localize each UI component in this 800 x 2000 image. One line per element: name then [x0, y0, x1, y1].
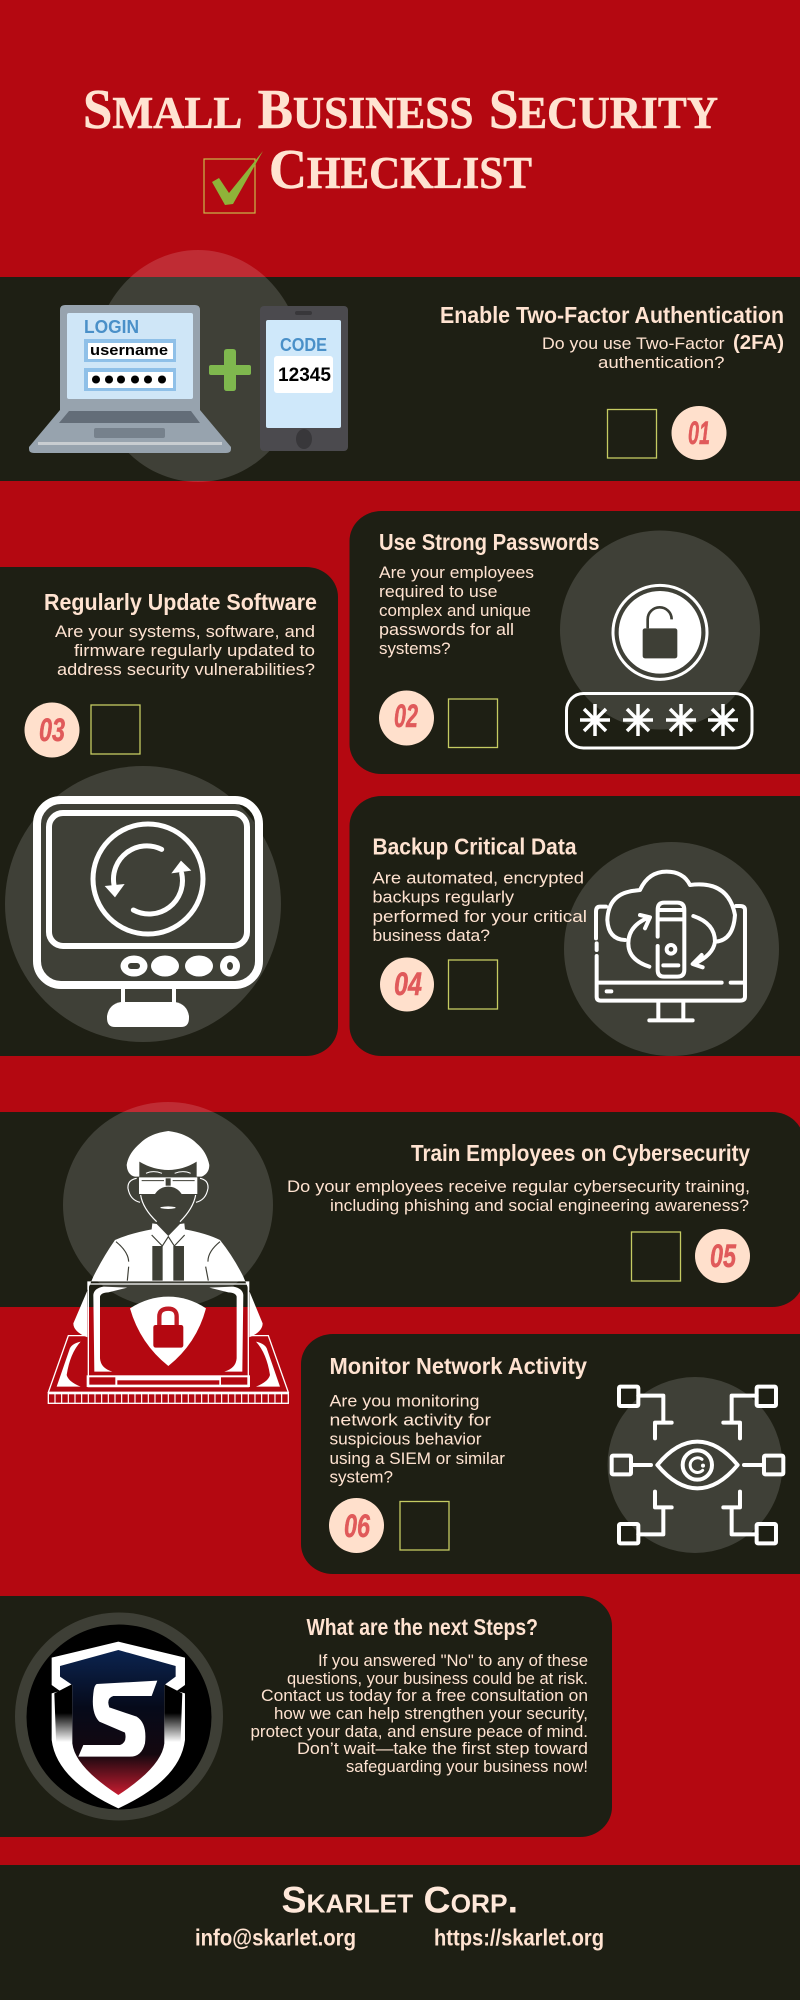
icon: cloud backup monitor [596, 872, 745, 1020]
number badge 01 [672, 406, 726, 460]
question text: including phishing and social engineering awareness? [330, 1196, 749, 1215]
question text: performed for your critical [372, 907, 587, 926]
question text: (2FA) [733, 332, 784, 354]
company name: Skarlet Corp. [282, 1880, 518, 1920]
question text: Are automated, encrypted [372, 868, 584, 888]
keyboard base [48, 1336, 288, 1403]
hair [127, 1131, 209, 1177]
panel: two-factor authentication [0, 250, 800, 482]
email: info@skarlet.org [195, 1924, 356, 1950]
title [83, 70, 718, 203]
heading: What are the next Steps? [306, 1614, 538, 1640]
body text: safeguarding your business now! [346, 1757, 588, 1776]
icon: employee at secure laptop [48, 1131, 288, 1403]
body text: Contact us today for a free consultation on [261, 1686, 588, 1705]
number badge 04 [380, 958, 434, 1012]
question text: Are you monitoring [330, 1392, 480, 1410]
icon: laptop login [29, 305, 231, 453]
question text: Do your employees receive regular cybersecurity training, [287, 1177, 750, 1196]
question text [330, 1392, 505, 1486]
number badge 02: 02 [394, 698, 418, 734]
panel: strong passwords [350, 511, 800, 774]
question text: backups regularly [372, 888, 515, 906]
panel: update software [0, 567, 338, 1056]
question text: Are your employees [379, 563, 534, 582]
body text: protect your data, and ensure peace of mind. [250, 1722, 588, 1741]
question text [287, 1177, 750, 1215]
question text: business data? [372, 926, 490, 945]
body text: If you answered "No" to any of these [318, 1651, 588, 1670]
question text: suspicious behavior [330, 1430, 482, 1448]
body text: Don’t wait—take the first step toward [297, 1739, 588, 1758]
checkbox [608, 410, 656, 458]
heading: Regularly Update Software [44, 589, 317, 615]
logo: Skarlet shield [15, 1612, 223, 1820]
heading: Enable Two-Factor Authentication [440, 302, 784, 328]
icon: title checkbox with green check [204, 151, 263, 213]
panel: backup data [350, 796, 800, 1056]
body text: questions, your business could be at risk. [287, 1669, 588, 1688]
question text: complex and unique [379, 601, 531, 620]
panel: train employees [0, 1102, 800, 1403]
laptop frame [87, 1284, 250, 1387]
question text: passwords for all [379, 620, 514, 639]
number badge 05: 05 [710, 1238, 737, 1274]
torso and arms [73, 1223, 263, 1337]
question text: using a SIEM or similar [330, 1449, 505, 1468]
question text [55, 622, 315, 679]
heading: Train Employees on Cybersecurity [411, 1140, 750, 1166]
number badge 03: 03 [39, 712, 65, 748]
icon: phone with code [260, 306, 348, 451]
body text [250, 1651, 588, 1776]
icon: network eye [612, 1387, 783, 1543]
body text: how we can help strengthen your security, [274, 1704, 588, 1723]
footer band [0, 1865, 800, 2000]
number badge 05 [695, 1229, 750, 1283]
icon: open padlock [613, 585, 707, 679]
heading: Backup Critical Data [372, 834, 577, 860]
panel: monitor network [301, 1334, 800, 1574]
icon: laptop login: LOGIN [84, 317, 139, 337]
icon: monitor with refresh [37, 800, 259, 1027]
icon: laptop login: username [90, 342, 168, 359]
checkbox [632, 1232, 680, 1281]
question text: Are your systems, software, and [55, 622, 315, 641]
icon: phone with code: 12345 [278, 365, 331, 386]
question text [379, 563, 534, 658]
question text [372, 868, 587, 945]
checkbox [448, 699, 498, 748]
number badge 02 [379, 690, 434, 746]
shield with padlock [130, 1297, 206, 1366]
question text: firmware regularly updated to [74, 641, 315, 660]
title: Checklist [269, 130, 532, 203]
question text: required to use [379, 582, 498, 601]
checkbox [448, 960, 498, 1009]
question text [542, 332, 784, 372]
title: Small Business Security [83, 70, 718, 143]
number badge 03 [24, 702, 80, 758]
question text: system? [330, 1468, 393, 1486]
icon: phone with code: CODE [280, 335, 327, 355]
question text: systems? [379, 639, 450, 658]
number badge 04: 04 [394, 966, 422, 1002]
glasses and face lines [128, 1172, 208, 1222]
heading: Monitor Network Activity [330, 1353, 587, 1379]
number badge 06 [329, 1498, 384, 1553]
question text: network activity for [330, 1410, 491, 1430]
panel: next steps [0, 1596, 612, 1837]
heading: Use Strong Passwords [379, 529, 600, 555]
website: https://skarlet.org [434, 1924, 604, 1950]
question text: address security vulnerabilities? [57, 660, 315, 679]
icon: plus sign [209, 349, 251, 391]
checkbox [400, 1502, 449, 1550]
question text: Do you use Two-Factor [542, 334, 725, 353]
shirt details [116, 1235, 220, 1281]
checkbox [91, 705, 140, 754]
icon: password field [566, 694, 752, 748]
question text: authentication? [598, 353, 724, 372]
number badge 01: 01 [688, 415, 710, 451]
number badge 06: 06 [344, 1508, 370, 1544]
